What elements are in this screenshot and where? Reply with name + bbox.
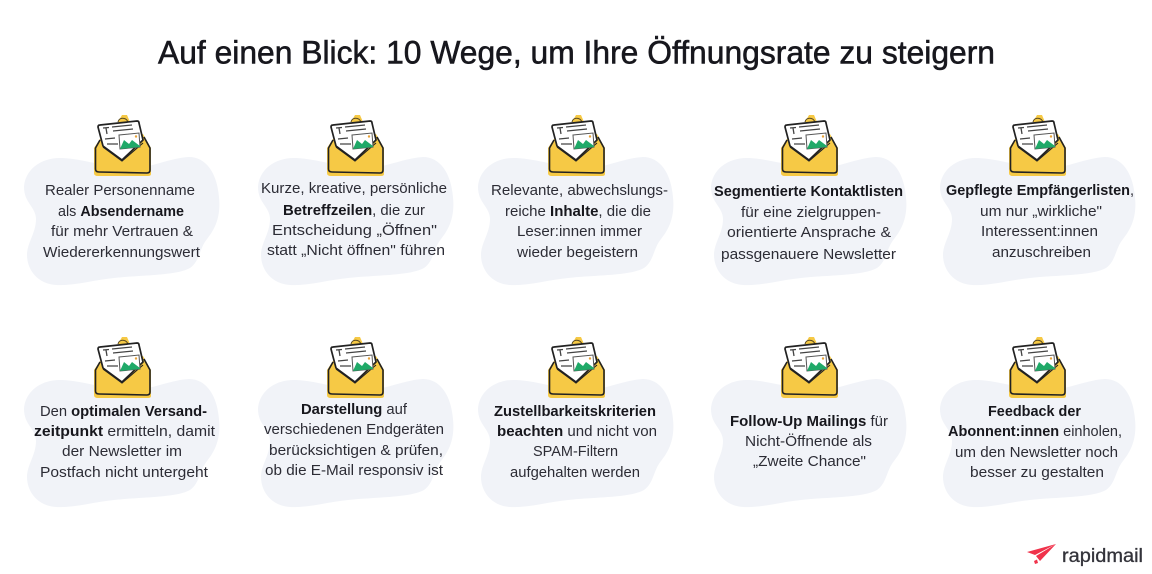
- icon: envelope: [781, 115, 838, 176]
- text block: [494, 403, 657, 481]
- icon: envelope: [327, 115, 384, 176]
- text block: Abonnent:innen einholen,: [948, 423, 1122, 440]
- text block: [730, 413, 888, 470]
- text block: zeitpunkt ermitteln, damit: [34, 423, 216, 440]
- text block: der Newsletter im: [62, 443, 182, 460]
- text block: als Absendername: [58, 203, 184, 220]
- panel: Betreffzeilen: [258, 115, 453, 285]
- icon: envelope: [548, 115, 605, 176]
- text block: wieder begeistern: [516, 244, 638, 261]
- text block: reiche Inhalte, die die: [505, 203, 651, 220]
- text block: Segmentierte Kontaktlisten: [714, 183, 903, 200]
- icon: envelope: [1009, 115, 1066, 176]
- text block: verschiedenen Endgeräten: [264, 421, 444, 438]
- text block: für mehr Vertrauen &: [51, 223, 193, 240]
- text block: orientierte Ansprache &: [727, 224, 891, 241]
- text block: [34, 403, 216, 481]
- text block: anzuschreiben: [992, 244, 1091, 261]
- text block: statt „Nicht öffnen" führen: [267, 242, 445, 259]
- panel: Kontaktlisten: [711, 115, 906, 285]
- panel: Follow-Up: [711, 337, 906, 507]
- text block: Wiedererkennungswert: [43, 244, 201, 261]
- text block: Kurze, kreative, persönliche: [261, 180, 447, 197]
- text block: Entscheidung „Öffnen": [272, 221, 437, 239]
- text block: besser zu gestalten: [970, 464, 1104, 481]
- text block: Interessent:innen: [981, 223, 1098, 240]
- text block: Follow-Up Mailings für: [730, 413, 888, 430]
- text block: Feedback der: [988, 403, 1081, 420]
- panel: Zustellbarkeit: [478, 337, 673, 507]
- text block: um nur „wirkliche": [980, 203, 1102, 220]
- icon: envelope: [781, 337, 838, 398]
- text block: berücksichtigen & prüfen,: [269, 442, 443, 459]
- text block: „Zweite Chance": [753, 453, 866, 470]
- text block: [491, 182, 668, 261]
- panel: Empfängerlisten: [940, 115, 1135, 285]
- logo: rapidmail: [1027, 544, 1143, 567]
- text block: Darstellung auf: [301, 401, 408, 418]
- text block: [264, 401, 444, 479]
- text block: Betreffzeilen, die zur: [283, 202, 425, 219]
- text block: Relevante, abwechslungs-: [491, 182, 668, 199]
- text block: Nicht-Öffnende als: [745, 432, 872, 450]
- text block: um den Newsletter noch: [955, 444, 1118, 461]
- panel: Darstellung: [258, 337, 453, 507]
- icon: envelope: [1009, 337, 1066, 398]
- panel: Inhalte: [478, 115, 673, 285]
- text block: passgenauere Newsletter: [721, 246, 896, 263]
- text block: Den optimalen Versand-: [40, 403, 207, 420]
- icon: envelope: [327, 337, 384, 398]
- text block: für eine zielgruppen-: [741, 204, 881, 221]
- text block: [948, 403, 1122, 481]
- panel: Feedback: [940, 337, 1135, 507]
- text block: aufgehalten werden: [510, 464, 640, 481]
- text block: Zustellbarkeitskriterien: [494, 403, 656, 420]
- icon: envelope: [548, 337, 605, 398]
- panel: Absendername: [24, 115, 219, 285]
- logo: rapidmail: rapidmail: [1062, 545, 1143, 567]
- text block: Realer Personenname: [45, 182, 195, 199]
- icon: envelope: [94, 337, 151, 398]
- icon: envelope: [94, 115, 151, 176]
- text block: ob die E-Mail responsiv ist: [265, 462, 444, 479]
- text block: SPAM-Filtern: [533, 443, 618, 460]
- text block: Gepflegte Empfängerlisten,: [946, 182, 1134, 199]
- icon: paper plane: [1027, 544, 1056, 564]
- text block: beachten und nicht von: [497, 423, 657, 440]
- text block: [946, 182, 1134, 261]
- text block: Postfach nicht untergeht: [40, 464, 209, 481]
- text block: Leser:innen immer: [517, 223, 642, 240]
- title: Auf einen Blick: 10 Wege, um Ihre Öffnungsrate zu steigern: [158, 34, 995, 70]
- text block: [261, 180, 447, 259]
- text block: [43, 182, 201, 261]
- panel: Versandzeitpunkt: [24, 337, 219, 507]
- text block: [714, 183, 903, 263]
